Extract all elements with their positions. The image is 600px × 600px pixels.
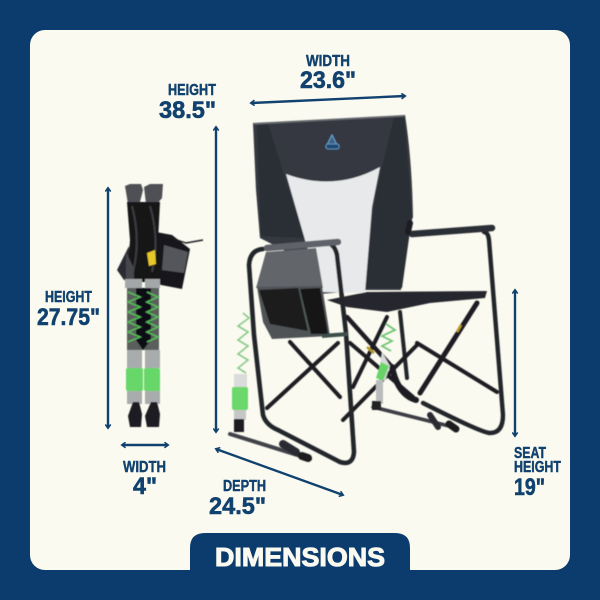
arrow: folded height [107, 188, 109, 428]
folded chair: yellow tag [147, 250, 156, 266]
chair back [253, 115, 413, 294]
label: depth: DEPTH [223, 478, 266, 495]
rear spring [372, 324, 395, 410]
label: folded width: WIDTH [123, 459, 166, 476]
arrow: height 38.5 [215, 127, 217, 432]
folded chair: storage bag [156, 232, 203, 289]
arrow: width 23.6 [251, 96, 405, 103]
folded chair: top caps [125, 184, 163, 204]
folded chair: black frame body [126, 202, 160, 282]
front spring [232, 313, 249, 432]
label: folded height: HEIGHT [45, 289, 92, 306]
organizer bag [256, 248, 348, 339]
folded chair: black feet [128, 402, 160, 427]
yellow brace labels [367, 325, 461, 353]
arrow: folded width [122, 444, 168, 446]
value: 4: 4" [133, 473, 157, 500]
logo badge [326, 135, 338, 147]
right armrest [408, 223, 492, 234]
value: 23.6: 23.6" [300, 67, 356, 94]
folded chair photo [117, 184, 203, 427]
label: height: HEIGHT [514, 459, 561, 476]
label: width: WIDTH [306, 53, 350, 70]
value: 38.5: 38.5" [159, 97, 216, 124]
value: 19: 19" [514, 474, 545, 501]
top seam of back [254, 116, 404, 124]
front foot bar [230, 434, 310, 459]
cross braces [267, 303, 497, 420]
folded chair: lower silver collars [127, 350, 160, 404]
folded chair: green cylinders [126, 368, 160, 391]
value: 24.5: 24.5" [209, 493, 266, 520]
mesh panel [286, 167, 380, 293]
value: 27.75: 27.75" [37, 304, 100, 331]
darker side panels [257, 117, 412, 288]
rear frame and rocker [400, 232, 503, 433]
dimension: folded height [37, 188, 108, 428]
folded chair: springs [127, 288, 159, 350]
label: height: HEIGHT [168, 82, 216, 99]
title tab [190, 533, 410, 572]
seat [327, 291, 487, 312]
logo base [326, 144, 339, 149]
folded chair: left dark bag flap [117, 246, 134, 284]
dimension: folded width [122, 445, 168, 500]
arrow: depth [216, 449, 343, 495]
front frame and rocker [249, 243, 354, 463]
dimension: height of chair [159, 82, 216, 432]
arrow: seat height [514, 290, 516, 436]
dimension: depth [209, 449, 343, 520]
dimension: width of chair [251, 53, 405, 103]
dimension: seat height [514, 290, 561, 501]
tab shape [190, 533, 410, 572]
title: DIMENSIONS [215, 542, 385, 572]
left armrest [267, 242, 338, 248]
label: seat: SEAT [514, 445, 546, 462]
rear foot bar [373, 407, 457, 429]
rocking chair photo [230, 115, 503, 463]
folded chair: silver collars [125, 279, 160, 288]
